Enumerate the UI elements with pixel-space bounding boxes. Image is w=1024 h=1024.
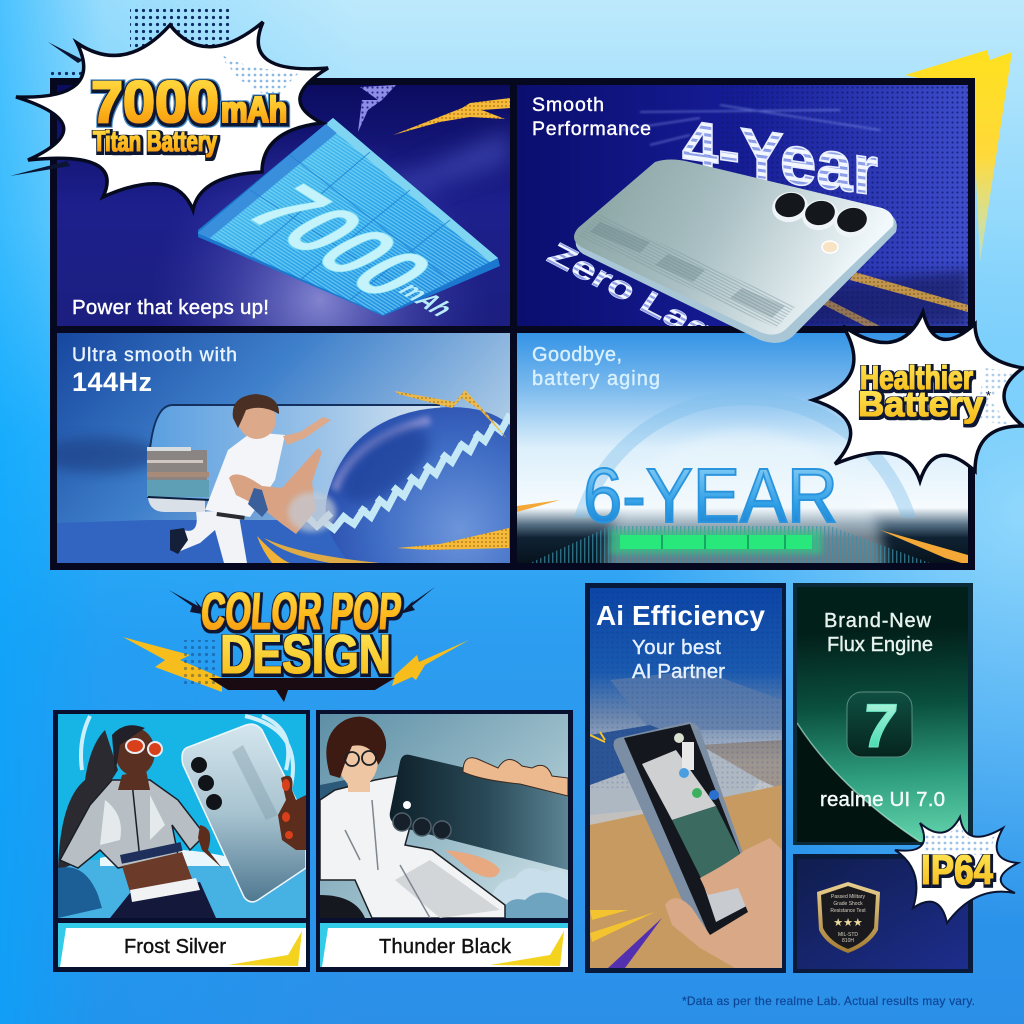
phone on its side	[147, 405, 440, 512]
base block	[209, 678, 395, 702]
badge text line 2: Grade Shock	[833, 901, 863, 907]
panel: 7000mAh battery	[57, 85, 510, 326]
illustration	[320, 714, 568, 918]
4-Year text: 4-Year	[682, 104, 878, 210]
panel: flux engine	[793, 583, 973, 845]
headline line 2: Battery	[858, 385, 984, 424]
icon: yellow lightning right	[392, 640, 469, 686]
badge standard: MIL-STD	[838, 932, 858, 938]
stars: ★★★	[833, 917, 863, 929]
phone render: silver phone overlapping panels	[574, 160, 897, 343]
headline line 1: Healthier	[860, 359, 973, 396]
badge text: Passed Military	[831, 894, 865, 900]
head	[117, 730, 154, 774]
icon: 7 app tile: 7	[859, 692, 900, 761]
subheading: Your best	[632, 636, 721, 659]
panel: ultra smooth	[40, 333, 510, 563]
cameras	[191, 757, 222, 810]
caption label: Frost Silver	[124, 936, 226, 958]
phone	[182, 724, 306, 902]
icon: dark lightning left and right	[169, 587, 435, 615]
panel: smooth performance	[517, 85, 968, 326]
panel: thunder black	[316, 710, 573, 972]
flash	[822, 241, 838, 253]
asterisk: *	[986, 388, 991, 403]
caption: Power that keeps up!	[72, 296, 269, 319]
footnote: *Data as per the realme Lab. Actual results may vary.	[682, 994, 975, 1008]
os label: realme UI 7.0	[820, 788, 945, 811]
battery illustration	[198, 118, 500, 320]
green battery glow	[530, 526, 930, 563]
arc ring	[574, 401, 916, 518]
thumb	[445, 850, 500, 878]
desk	[590, 785, 782, 968]
panel: military grade	[793, 854, 973, 973]
flash	[403, 801, 411, 809]
baseball player	[170, 394, 336, 563]
jacket and trousers	[320, 775, 505, 918]
glasses	[345, 751, 376, 766]
Zero Lag text: Zero Lag!	[541, 236, 734, 357]
orange swooshes	[257, 390, 509, 563]
headline mAh: mAh	[221, 89, 287, 130]
panel: ai efficiency	[585, 583, 786, 973]
subheading line 2: AI Partner	[632, 660, 725, 683]
heading: color pop design	[123, 583, 469, 702]
icon: small yellow sparks	[590, 732, 662, 968]
heading: Brand-New	[824, 610, 932, 632]
hair	[58, 730, 118, 870]
badge standard code: 810H	[842, 938, 854, 944]
orange streaks	[820, 272, 968, 326]
badge label: IP64	[921, 846, 994, 893]
head	[338, 733, 378, 787]
orange streaks	[517, 500, 968, 565]
baseball	[305, 407, 510, 563]
hand	[665, 838, 782, 968]
clouds	[490, 868, 568, 918]
fingers	[463, 758, 568, 796]
heading line 2: battery aging	[532, 368, 660, 390]
callout: 7000mAh burst	[10, 5, 328, 210]
cameras	[393, 813, 451, 839]
phone	[390, 755, 568, 870]
sunglasses	[126, 739, 162, 756]
heading: Ai Efficiency	[596, 600, 765, 631]
jacket	[60, 780, 205, 868]
6-YEAR title: 6-YEAR	[583, 453, 838, 539]
hair	[326, 717, 386, 778]
illustration	[58, 714, 306, 918]
heading: Ultra smooth with	[72, 344, 237, 366]
icon: yellow lightning left	[123, 637, 222, 692]
callout: IP64 burst	[895, 817, 1018, 923]
icon: orange lightning	[393, 98, 510, 135]
headline 7000: 7000	[91, 70, 219, 135]
refresh rate: 144Hz	[72, 367, 152, 397]
badge text line 3: Resistance Test	[830, 908, 866, 914]
pants	[110, 882, 216, 918]
helmet	[58, 867, 102, 918]
caption box	[58, 923, 306, 967]
subheadline: Titan Battery	[93, 126, 217, 158]
motorbike	[320, 895, 365, 918]
panel: frost silver	[53, 710, 310, 972]
heading: Smooth	[532, 94, 604, 116]
title line 2: DESIGN	[220, 623, 391, 685]
midriff	[122, 852, 194, 892]
title line 1: COLOR POP	[199, 583, 403, 641]
icon: yellow lightning behind frame	[905, 50, 1012, 262]
heading line 2: Flux Engine	[827, 634, 933, 656]
callout: healthier battery burst	[813, 312, 1023, 481]
icon: 7 app tile	[847, 692, 912, 761]
halftone	[180, 640, 218, 688]
caption label: Thunder Black	[379, 936, 512, 958]
badge: shield	[817, 882, 880, 953]
icon: violet halftone spark	[358, 85, 396, 132]
smartphone	[614, 722, 763, 946]
battery unit: mAh	[391, 279, 460, 320]
black frame around top panels	[50, 78, 975, 570]
panel: battery aging	[517, 333, 968, 563]
heading: Goodbye,	[532, 344, 622, 366]
caption box	[320, 923, 568, 967]
hand and nails	[198, 776, 306, 868]
heading line 2: Performance	[532, 118, 651, 140]
camera lenses	[769, 189, 873, 240]
battery number: 7000	[223, 172, 456, 311]
